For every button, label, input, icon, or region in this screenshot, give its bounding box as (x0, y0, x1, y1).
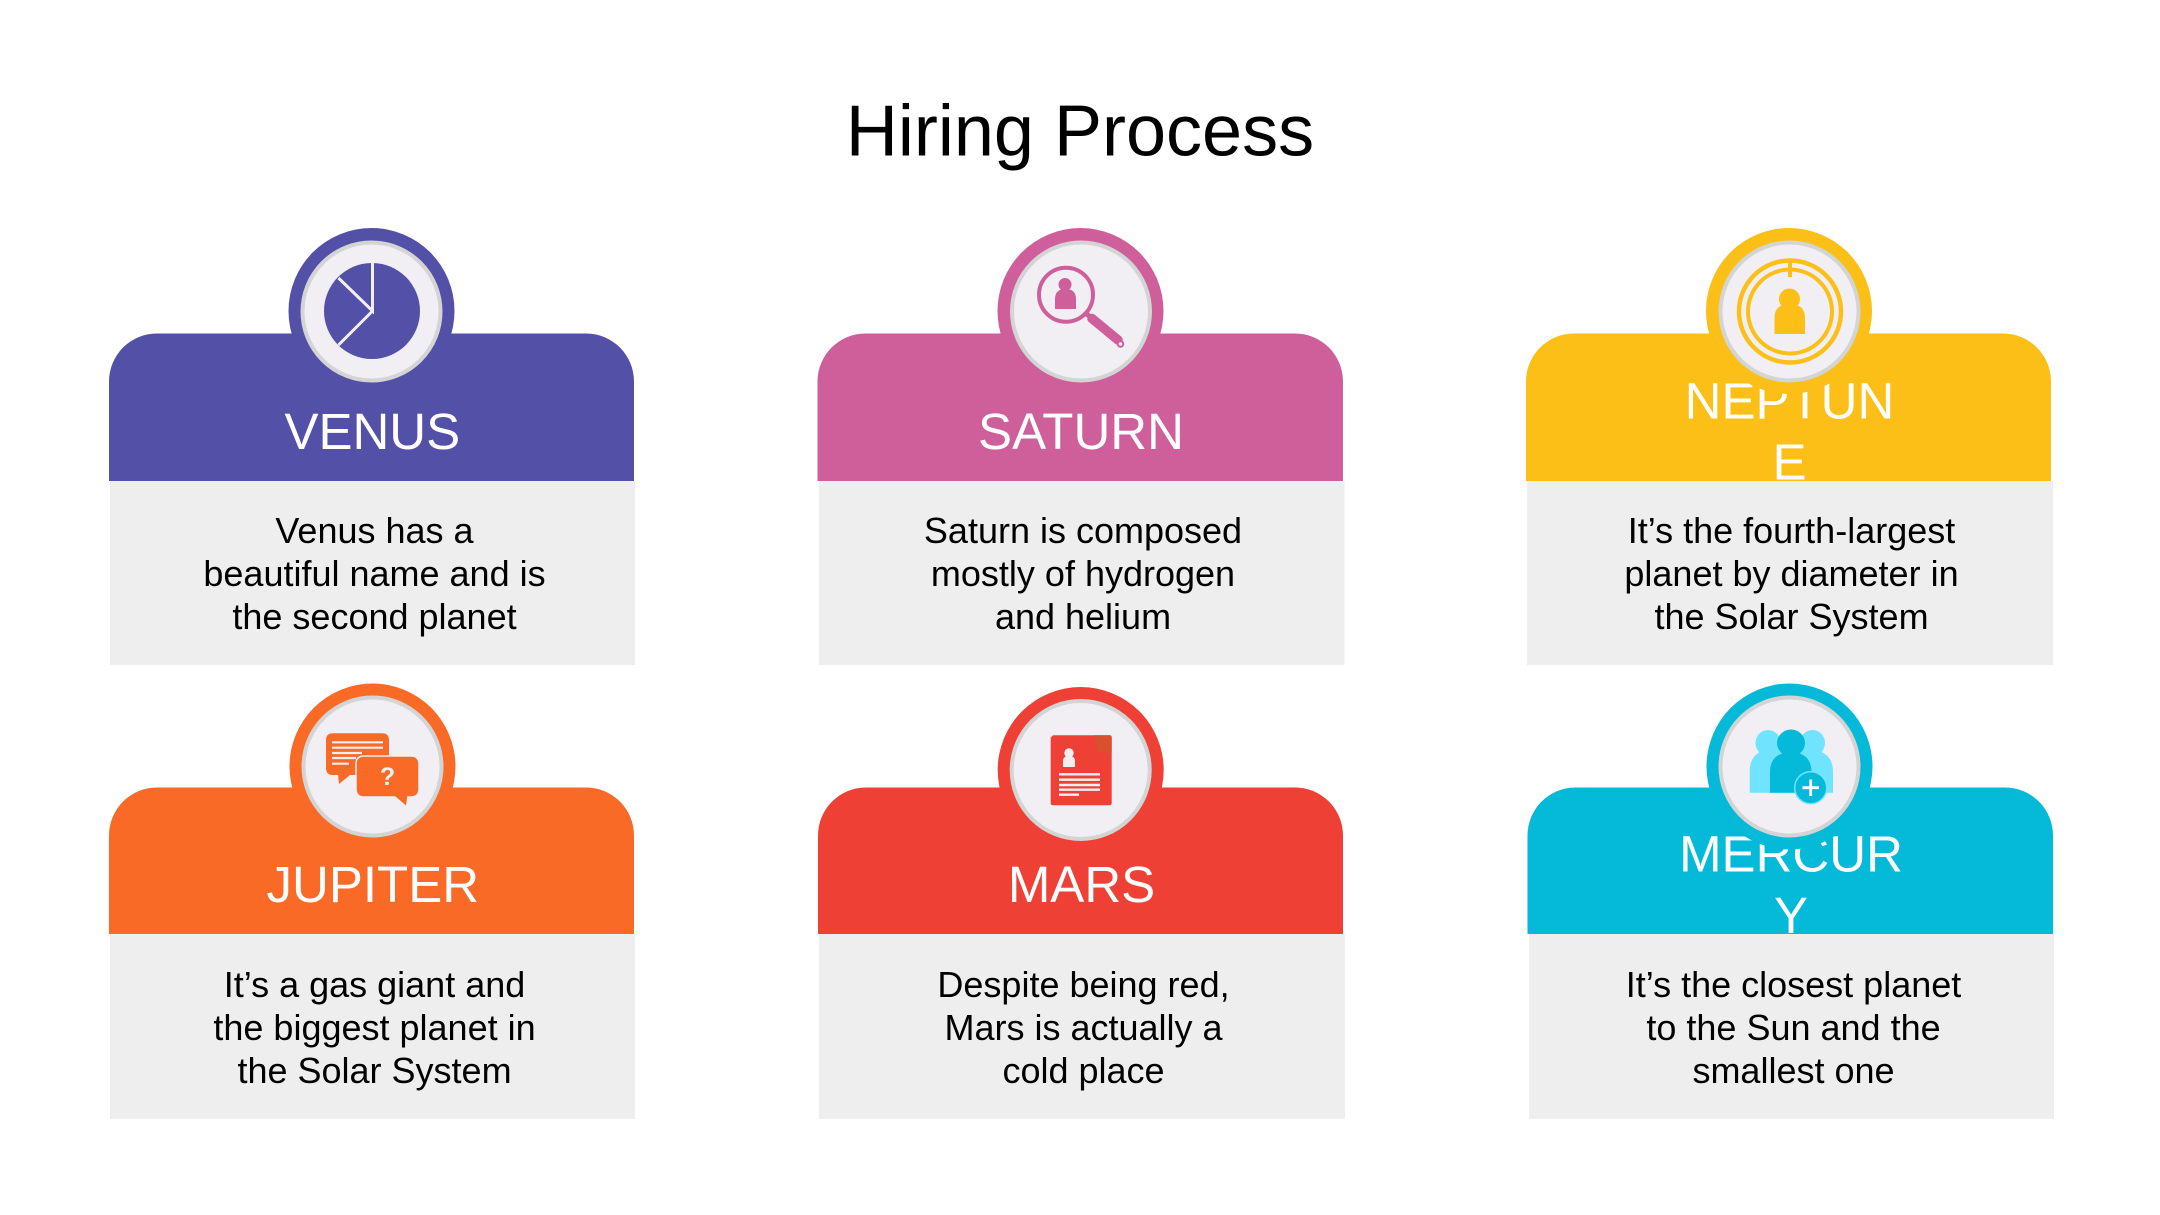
header: Venus (109, 334, 634, 481)
heading: Mercury (wrapped): Y (1774, 887, 1808, 944)
text: Mercury description: smallest one (1692, 1050, 1895, 1091)
text: Saturn description: and helium (995, 596, 1171, 637)
panel: Mars (818, 687, 1345, 1119)
header: Saturn (818, 334, 1343, 481)
heading: Neptune (wrapped): E (1772, 434, 1807, 490)
text: Jupiter description: the biggest planet in (213, 1007, 536, 1048)
heading: Mars: MARS (1008, 856, 1155, 913)
body box: Jupiter (110, 934, 635, 1119)
heading: Jupiter: JUPITER (267, 856, 479, 913)
text: Mars description: cold place (1002, 1050, 1165, 1091)
text: Jupiter description: the Solar System (237, 1050, 512, 1091)
heading: Venus: VENUS (284, 403, 460, 460)
header: Jupiter (109, 788, 634, 934)
title: Hiring Process (846, 92, 1314, 172)
text: Saturn description: Saturn is composed (924, 510, 1242, 551)
icon plate: Mars (1012, 701, 1150, 839)
icon plate: Saturn (1012, 242, 1150, 380)
icon: resume document (1051, 735, 1112, 805)
icon ring: Mars (998, 687, 1164, 853)
text: Neptune description: planet by diameter in (1624, 553, 1959, 594)
icon plate: Neptune (1720, 242, 1858, 380)
body box: Mars (819, 934, 1345, 1119)
text: Venus description: beautiful name and is (203, 553, 546, 594)
body box: Neptune (1527, 481, 2053, 665)
icon: team with plus badge (1750, 730, 1833, 804)
icon plate: Mercury (1720, 698, 1858, 836)
icon: speech bubbles (326, 733, 419, 807)
panel: Venus (109, 228, 635, 665)
body box: Mercury (1529, 934, 2054, 1119)
text: Mercury description: It’s the closest planet (1626, 964, 1961, 1005)
icon ring: Mercury (1706, 684, 1872, 850)
panel: Jupiter (109, 684, 635, 1119)
panel: Saturn (818, 228, 1344, 665)
text: Mars description: Despite being red, (937, 964, 1230, 1005)
text: Saturn description: mostly of hydrogen (931, 553, 1235, 594)
header: Mars (818, 788, 1343, 934)
icon plate: Venus (302, 242, 440, 380)
icon: pie chart (324, 263, 420, 359)
text: Neptune description: the Solar System (1654, 596, 1929, 637)
icon: target on person (1739, 260, 1841, 362)
text: Mars description: Mars is actually a (944, 1007, 1224, 1048)
icon ring: Jupiter (290, 684, 456, 850)
header: Neptune (1526, 334, 2051, 481)
icon: speech bubbles: ? (380, 763, 395, 791)
text: Venus description: Venus has a (275, 510, 475, 551)
text: Neptune description: It’s the fourth-largest (1628, 510, 1955, 551)
panel: Mercury (1528, 684, 2054, 1119)
icon plate: Jupiter (304, 698, 442, 836)
heading: Mercury (wrapped): MERCUR (1679, 826, 1903, 882)
icon ring: Neptune (1706, 228, 1872, 394)
icon: magnifier over person (1039, 268, 1123, 347)
icon ring: Saturn (998, 228, 1164, 394)
text: Mercury description: to the Sun and the (1646, 1007, 1941, 1048)
text: Jupiter description: It’s a gas giant and (224, 964, 525, 1005)
body box: Venus (110, 481, 635, 665)
panel: Neptune (1526, 228, 2053, 665)
text: Venus description: the second planet (232, 596, 517, 637)
heading: Saturn: SATURN (978, 403, 1184, 460)
body box: Saturn (819, 481, 1344, 665)
heading: Neptune (wrapped): NEPTUN (1685, 372, 1894, 430)
icon ring: Venus (288, 228, 454, 394)
header: Mercury (1528, 788, 2053, 934)
